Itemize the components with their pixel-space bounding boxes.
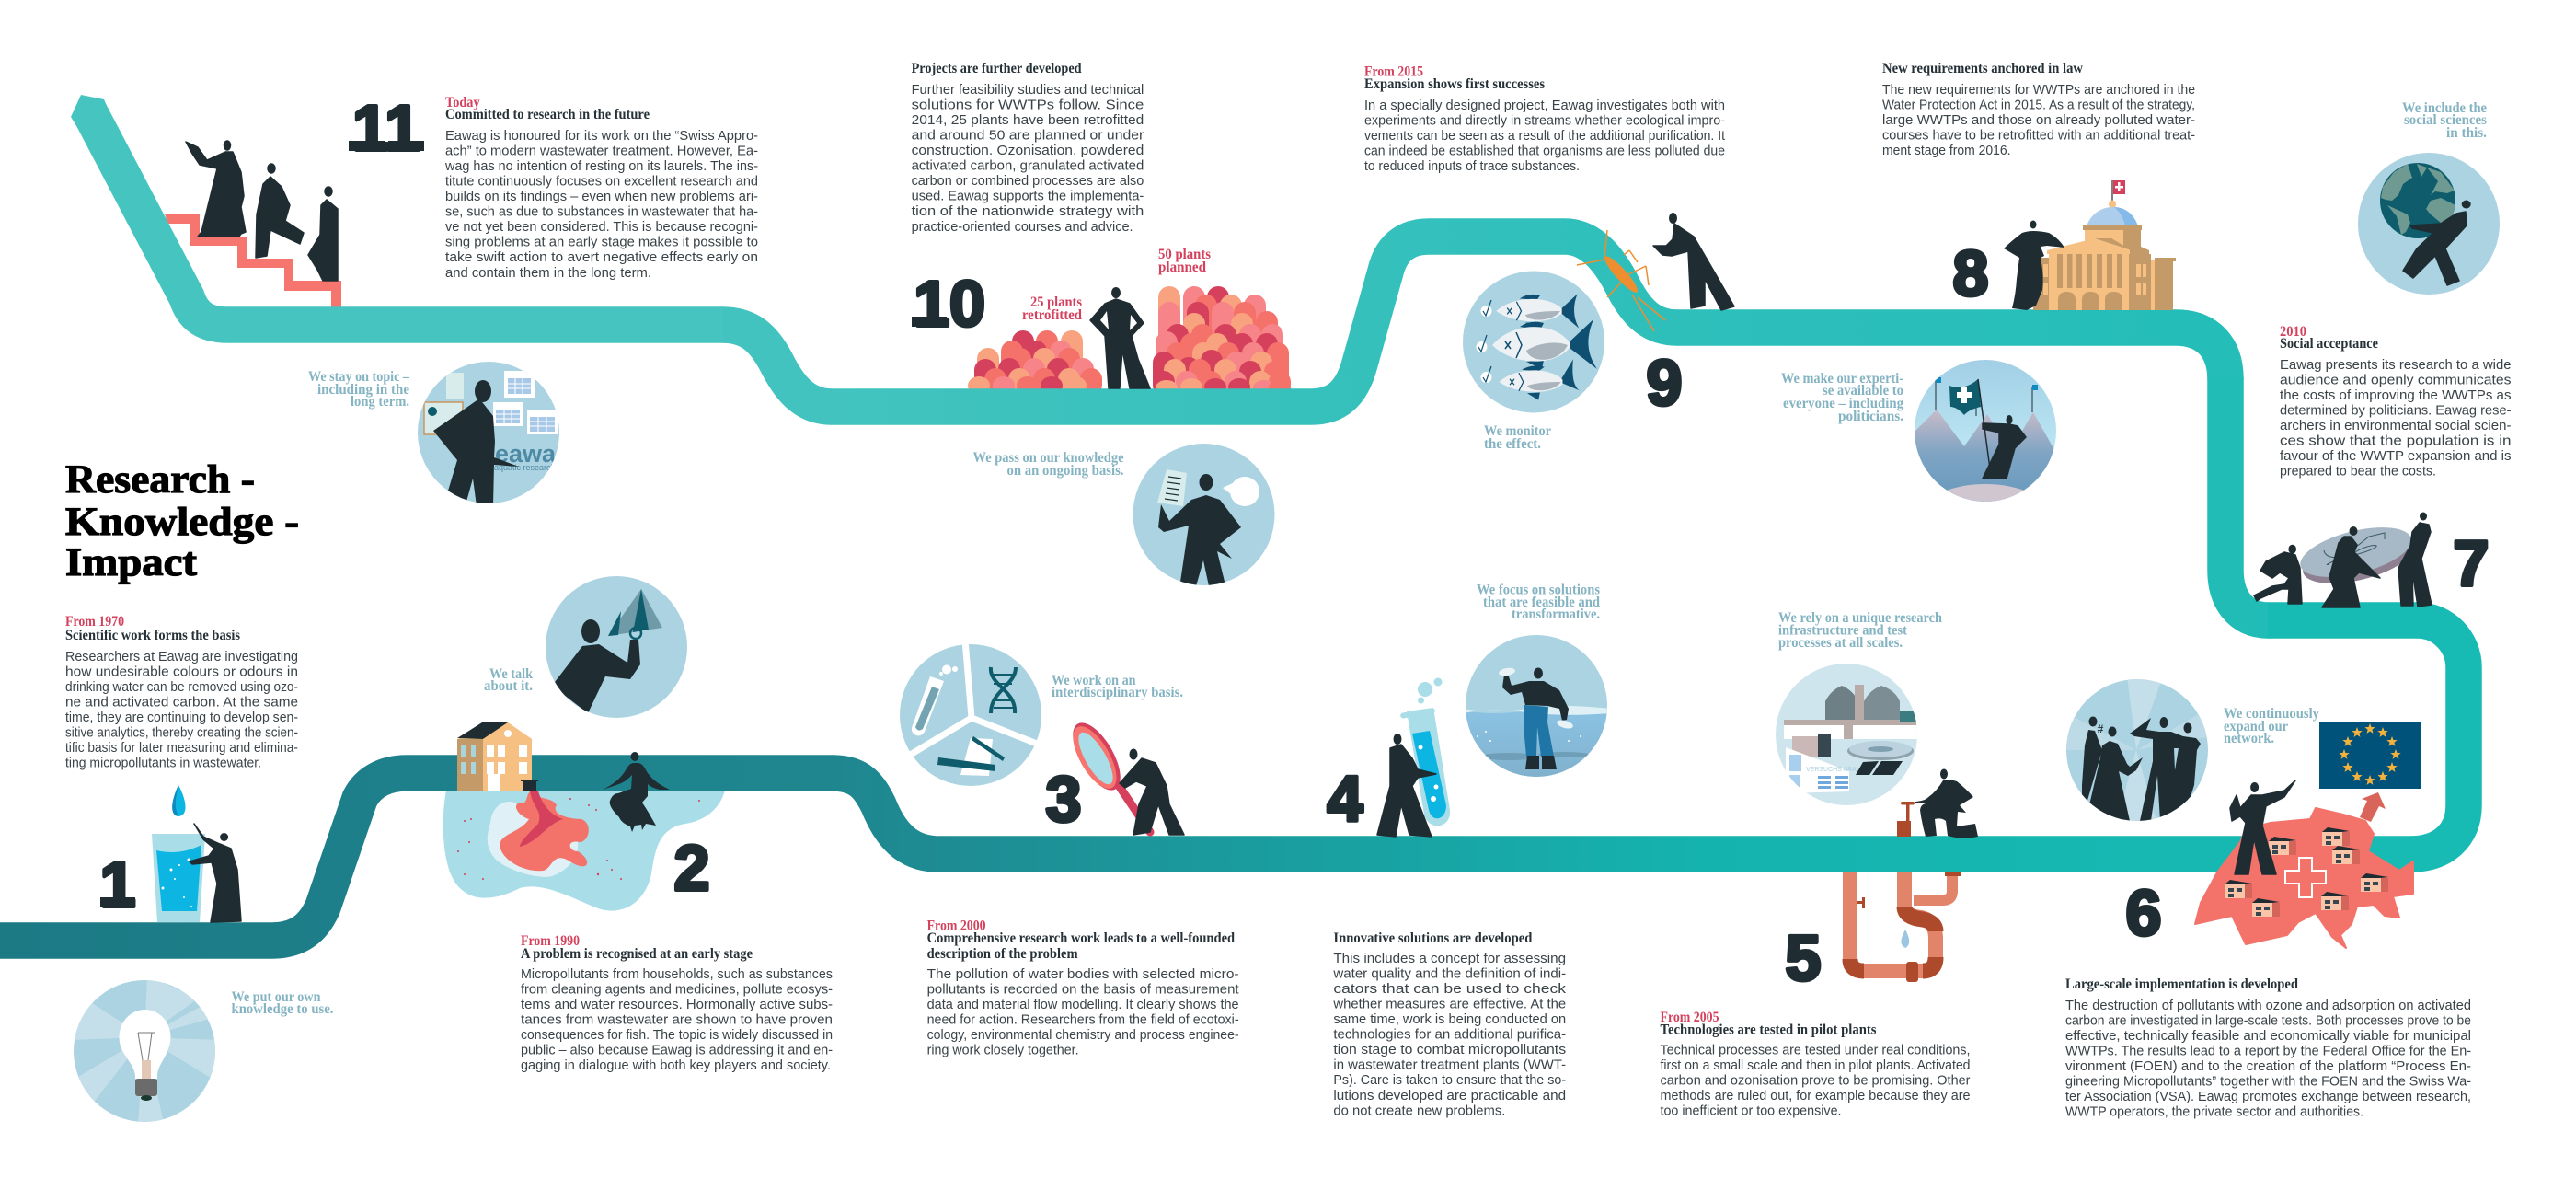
label: we stay on topic <box>308 369 409 410</box>
pile of 50 planned plants <box>1153 286 1291 396</box>
label: 25 plants retrofitted: 25 plants <box>1030 295 1082 310</box>
text block: step 6: WWTP operators, the private sector and authorities. <box>2065 1105 2363 1120</box>
circle icon: long-term topic <box>418 362 559 503</box>
text block: step 2 <box>521 933 833 1073</box>
text block: step 1 <box>65 614 298 771</box>
label: we monitor the effect: the effect. <box>1484 436 1541 452</box>
text block: step 7 <box>2280 324 2512 479</box>
label: 50 plants planned: 50 plants <box>1158 247 1211 262</box>
text block: step 9: In a specially designed project, Eawag investigates both with <box>1364 98 1725 113</box>
label: we rely on a unique research infrastructure: infrastructure and test <box>1778 622 1908 639</box>
text block: step 11: builds on its findings – even when new problems ari- <box>445 190 758 204</box>
text block: step 1: how undesirable colours or odours in <box>65 664 298 679</box>
step 1: glass, drop and figure <box>152 785 241 922</box>
text block: step 11: Today <box>445 95 480 110</box>
label: we pass on our knowledge: We pass on our knowledge <box>973 450 1124 466</box>
text block: step 4: do not create new problems. <box>1333 1103 1505 1118</box>
label: we put our own knowledge to use <box>232 989 334 1017</box>
text block: step 2: tems and water resources. Hormonally active subs- <box>521 998 833 1012</box>
label: 50 plants planned: planned <box>1158 260 1206 275</box>
text block: step 7: Eawag presents its research to a wide <box>2280 358 2512 373</box>
step 7: coin and three figures <box>2254 512 2432 607</box>
step 10: figure between piles <box>1090 287 1150 388</box>
text block: step 8: Water Protection Act in 2015. As a result of the strategy, <box>1882 98 2195 112</box>
text block: step 5: Technologies are tested in pilot plants <box>1660 1022 1877 1037</box>
text block: step 3: description of the problem <box>927 946 1078 962</box>
number 8: 8 <box>1953 237 1988 309</box>
label: we include the social sciences <box>2402 100 2487 141</box>
text block: step 10: carbon or combined processes are also <box>912 174 1144 189</box>
text block: step 10: Further feasibility studies and technical <box>912 83 1144 98</box>
text block: step 6: ter Association (VSA). Eawag promotes exchange between research, <box>2065 1090 2471 1104</box>
circle icon: mountain flag <box>1915 360 2056 502</box>
text block: step 11: titute continuously focuses on excellent research and <box>445 175 758 190</box>
circle icon: research infrastructure <box>1776 664 1918 805</box>
text block: step 4: in wastewater treatment plants (WWT- <box>1333 1058 1566 1073</box>
text block: step 3: ring work closely together. <box>927 1044 1079 1058</box>
label: we work on an interdisciplinary basis: We work on an <box>1052 673 1136 688</box>
text block: step 9: experiments and directly in streams whether ecological impro- <box>1364 114 1725 129</box>
label: we put our own knowledge to use: We put our own <box>232 989 321 1005</box>
dna helix <box>991 667 1016 713</box>
text block: step 1: tific basis for later measuring and elimina- <box>65 741 298 756</box>
label: 50 plants planned <box>1158 247 1211 275</box>
label: we include the social sciences: in this. <box>2446 125 2487 141</box>
text block: step 11: ach” to modern wastewater treatment. However, Ea- <box>445 144 758 158</box>
text block: step 4: tion stage to combat micropollutants <box>1333 1043 1566 1057</box>
text block: step 4: water quality and the definition of indi- <box>1332 966 1566 981</box>
text block: step 3: need for action. Researchers from the field of ecotoxi- <box>927 1013 1239 1028</box>
text block: step 11: se, such as due to substances in wastewater that ha- <box>445 205 758 220</box>
label: we focus on solutions: We focus on solutions <box>1477 583 1600 598</box>
text block: step 8: courses have to be retrofitted with an additional treat- <box>1882 129 2195 144</box>
text block: step 2: From 1990 <box>521 933 580 949</box>
number 11: 11 <box>352 92 420 164</box>
text block: step 7: determined by politicians. Eawag rese- <box>2280 404 2512 419</box>
text block: step 7: Social acceptance <box>2280 336 2378 352</box>
text block: step 4: same time, work is being conducted on <box>1333 1012 1566 1027</box>
label: 25 plants retrofitted: retrofitted <box>1022 307 1082 323</box>
text block: step 11: Eawag is honoured for its work on the “Swiss Appro- <box>445 129 758 144</box>
text block: step 10: Projects are further developed <box>912 61 1082 76</box>
label: we continuously expand our network <box>2224 706 2319 746</box>
text block: step 7: prepared to bear the costs. <box>2280 465 2436 479</box>
label: we talk about it: We talk <box>489 666 533 682</box>
label: we monitor the effect: We monitor <box>1484 423 1551 439</box>
text block: step 8: large WWTPs and those on already polluted water- <box>1882 113 2195 128</box>
label: we pass on our knowledge: on an ongoing basis. <box>1006 463 1124 479</box>
text block: step 6: carbon are investigated in large-scale tests. Both processes prove to be <box>2065 1014 2471 1029</box>
circle icon: megaphone <box>546 576 687 718</box>
circle icon: long-term topic: aquatic research <box>494 463 556 472</box>
pile of 25 retrofitted plants <box>968 330 1102 396</box>
text block: step 3: data and material flow modelling. It clearly shows the <box>927 998 1239 1012</box>
icon: pipes under the path <box>1850 865 1961 982</box>
label: we continuously expand our network: We continuously <box>2224 706 2319 722</box>
text block: step 5: first on a small scale and then in pilot plants. Activated <box>1660 1058 1971 1073</box>
circle icon: research infrastructure: VERSUCHS ARA <box>1806 767 1857 773</box>
text block: step 7: the costs of improving the WWTPs as <box>2280 388 2512 403</box>
text block: step 3: cology, environmental chemistry and process enginee- <box>927 1028 1239 1043</box>
text block: step 4: whether measures are effective. At the <box>1332 998 1566 1012</box>
label: we rely on a unique research infrastructure <box>1778 610 1942 651</box>
label: we stay on topic: including in the <box>317 382 409 398</box>
number 3: 3 <box>1046 763 1081 835</box>
number 4: 4 <box>1328 763 1363 835</box>
text block: step 7: audience and openly communicates <box>2280 374 2512 388</box>
text block: step 3: From 2000 <box>927 918 986 934</box>
label: we talk about it <box>484 666 533 694</box>
text block: step 5: too inefficient or too expensive. <box>1660 1104 1842 1119</box>
arrow tip of the path <box>71 95 110 129</box>
text block: step 6 <box>2065 976 2471 1120</box>
number 2: 2 <box>674 832 709 904</box>
icon: stairs behind path <box>165 214 341 313</box>
text block: step 1: ne and activated carbon. At the same <box>65 696 298 711</box>
number 10: 10 <box>914 268 985 340</box>
text block: step 10: construction. Ozonisation, powdered <box>912 144 1144 158</box>
title: Impact <box>65 541 198 584</box>
text block: step 10: 2014, 25 plants have been retrofitted <box>912 113 1144 128</box>
text block: step 2: Micropollutants from households, such as substances <box>521 967 833 982</box>
text block: step 4: cators that can be used to check <box>1333 982 1567 997</box>
text block: step 11: wag has no intention of resting on its laurels. The ins- <box>444 159 758 174</box>
text block: step 5: From 2005 <box>1660 1010 1719 1025</box>
fish 2 <box>1492 319 1597 369</box>
small houses <box>2225 827 2388 917</box>
text block: step 4: Innovative solutions are developed <box>1333 930 1533 946</box>
text block: step 7: favour of the WWTP expansion and is <box>2280 449 2512 464</box>
label: we include the social sciences: social sciences <box>2404 112 2487 128</box>
text block: step 6: vironment (FOEN) and to the creation of the platform “Process En- <box>2065 1059 2471 1074</box>
text block: step 11: sing problems at an early stage makes it possible to <box>445 236 758 250</box>
text block: step 8: The new requirements for WWTPs are anchored in the <box>1882 83 2195 98</box>
text block: step 2: tances from wastewater are shown to have proven <box>521 1013 833 1028</box>
text block: step 3: The pollution of water bodies with selected micro- <box>927 967 1239 982</box>
text block: step 11: take swift action to avert negative effects early on <box>445 250 758 265</box>
text block: step 9: can indeed be established that organisms are less polluted due <box>1364 144 1725 159</box>
text block: step 4: technologies for an additional purifica- <box>1333 1028 1566 1043</box>
text block: step 1: ting micropollutants in wastewater. <box>65 757 261 771</box>
label: we stay on topic: We stay on topic – <box>308 369 409 385</box>
label: we rely on a unique research infrastructure: processes at all scales. <box>1778 635 1903 651</box>
text block: step 6: The destruction of pollutants with ozone and adsorption on activated <box>2065 999 2471 1013</box>
text block: step 7: ces show that the population is in <box>2280 434 2512 449</box>
text block: step 4 <box>1332 930 1567 1118</box>
number 9: 9 <box>1647 347 1682 419</box>
text block: step 1: Scientific work forms the basis <box>65 628 240 643</box>
circle icon: light bulb <box>72 976 221 1123</box>
text block: step 11 <box>444 95 758 281</box>
EU flag <box>2319 722 2421 789</box>
text block: step 1: time, they are continuing to develop sen- <box>65 711 298 725</box>
title: Knowledge - <box>65 501 299 544</box>
label: 25 plants retrofitted <box>1022 295 1082 323</box>
check marks <box>1476 300 1492 383</box>
text block: step 6: effective, technically feasible and economically viable for municipal <box>2065 1029 2471 1044</box>
text block: step 4: lutions developed are practicable and <box>1333 1089 1566 1103</box>
label: we focus on solutions <box>1477 583 1600 622</box>
step 3: magnifier and figure <box>1064 715 1184 835</box>
text block: step 10: tion of the nationwide strategy with <box>912 204 1144 219</box>
number 7: 7 <box>2454 527 2489 599</box>
label: we rely on a unique research infrastructure: We rely on a unique research <box>1778 610 1942 626</box>
step 8: parliament building and figure <box>2004 180 2176 310</box>
label: we make our expertise available: We make our experti- <box>1781 371 1903 387</box>
text block: step 2: consequences for fish. The topic is widely discussed in <box>521 1028 833 1043</box>
label: we work on an interdisciplinary basis: interdisciplinary basis. <box>1052 685 1183 700</box>
text block: step 10: used. Eawag supports the implementa- <box>912 190 1144 204</box>
icon: plant piles <box>968 286 1291 396</box>
text block: step 3 <box>927 918 1239 1058</box>
label: we talk about it: about it. <box>484 678 533 694</box>
circle icon: network: # <box>2098 722 2104 735</box>
text block: step 4: This includes a concept for assessing <box>1333 952 1566 966</box>
text block: step 1: From 1970 <box>65 614 124 630</box>
circle icon: monitoring fish <box>1463 271 1604 412</box>
label: we focus on solutions: transformative. <box>1512 607 1600 622</box>
text block: step 9: Expansion shows first successes <box>1364 76 1545 92</box>
figures on the stairs, step 11 <box>186 141 338 281</box>
text block: step 7: archers in environmental social scien- <box>2280 419 2512 433</box>
circle icon: network <box>2065 676 2213 824</box>
circle icon: passing on knowledge <box>1133 444 1275 586</box>
text block: step 7: 2010 <box>2280 324 2306 340</box>
test tube <box>912 664 958 735</box>
label: we stay on topic: long term. <box>351 394 409 410</box>
text block: step 3: Comprehensive research work leads to a well-founded <box>927 930 1235 946</box>
text block: step 2: from cleaning agents and medicines, pollute ecosys- <box>521 983 833 998</box>
text block: step 2: gaging in dialogue with both key players and society. <box>521 1058 831 1073</box>
text block: step 11: and contain them in the long term. <box>445 266 651 281</box>
step 6: Switzerland map, houses, EU flag and figure <box>2195 722 2421 948</box>
label: we include the social sciences: We include the <box>2402 100 2487 116</box>
label: we make our expertise available: everyone – including <box>1783 396 1903 411</box>
text block: step 8: ment stage from 2016. <box>1882 144 2011 158</box>
text block: step 2: A problem is recognised at an early stage <box>521 946 753 962</box>
number 1: 1 <box>100 849 135 920</box>
circle icon: person carrying the globe <box>2358 153 2500 295</box>
text block: step 10: solutions for WWTPs follow. Since <box>912 98 1144 112</box>
label: we make our expertise available <box>1781 371 1903 424</box>
text block: step 10: activated carbon, granulated activated <box>912 159 1144 174</box>
label: we pass on our knowledge <box>973 450 1124 479</box>
text block: step 5: methods are ruled out, for example because they are <box>1660 1089 1971 1103</box>
text block: step 5: carbon and ozonisation prove to be promising. Other <box>1660 1074 1971 1089</box>
text block: step 5: Technical processes are tested under real conditions, <box>1660 1044 1971 1058</box>
fish 1 <box>1496 294 1579 329</box>
label: we continuously expand our network: expand our <box>2224 719 2288 734</box>
title <box>65 458 299 584</box>
text block: step 8: New requirements anchored in law <box>1882 61 2084 76</box>
sitting figure <box>603 752 670 832</box>
pointing figure <box>2230 780 2295 874</box>
label: we focus on solutions: that are feasible and <box>1483 595 1600 610</box>
label: we monitor the effect <box>1484 423 1551 452</box>
circle icon: long-term topic: eawag <box>495 440 571 468</box>
arrow toward the flag <box>2360 792 2386 822</box>
text block: step 9 <box>1364 64 1725 174</box>
label: we work on an interdisciplinary basis <box>1052 673 1183 700</box>
label: we continuously expand our network: network. <box>2224 731 2274 746</box>
step 5: valve and kneeling figure <box>1897 769 1978 838</box>
circle icon: focus on solutions <box>1463 635 1610 782</box>
text block: step 11: Committed to research in the future <box>445 107 650 122</box>
text block: step 4: Ps). Care is taken to ensure that the so- <box>1333 1073 1566 1088</box>
text block: step 1: sitive analytics, thereby creating the scien- <box>65 726 298 741</box>
text block: step 1: Researchers at Eawag are investigating <box>65 650 298 664</box>
text block: step 9: to reduced inputs of trace substances. <box>1364 159 1580 174</box>
ruler and pencil <box>937 736 1005 776</box>
text block: step 11: ve not yet been considered. This is because recogni- <box>445 220 758 235</box>
label: we put our own knowledge to use: knowledge to use. <box>232 1001 334 1017</box>
text block: step 2: public – also because Eawag is addressing it and en- <box>521 1044 833 1058</box>
text block: step 6: gineering Micropollutants” together with the FOEN and the Swiss Wa- <box>2065 1075 2471 1090</box>
winding path band <box>0 108 2464 941</box>
text block: step 6: Large-scale implementation is developed <box>2065 976 2298 992</box>
text block: step 9: From 2015 <box>1364 64 1423 80</box>
label: we make our expertise available: se available to <box>1823 383 1903 399</box>
text block: step 5 <box>1660 1010 1971 1119</box>
circle icon: interdisciplinary pie <box>900 640 1041 786</box>
text block: step 10: practice-oriented courses and advice. <box>912 220 1133 235</box>
label: we make our expertise available: politicians. <box>1838 409 1903 424</box>
fish 3 <box>1500 359 1581 400</box>
text block: step 3: pollutants is recorded on the basis of measurement <box>927 983 1239 998</box>
text block: step 10: and around 50 are planned or under <box>912 129 1144 144</box>
text block: step 6: WWTPs. The results lead to a report by the Federal Office for the En- <box>2065 1045 2471 1059</box>
title: Research - <box>65 458 255 502</box>
text block: step 10 <box>912 61 1144 235</box>
text block: step 9: vements can be seen as a result of the additional purification. It <box>1364 129 1725 144</box>
text block: step 8 <box>1882 61 2195 158</box>
number 6: 6 <box>2126 877 2161 949</box>
house <box>457 722 538 791</box>
number 5: 5 <box>1786 922 1821 994</box>
step 4: test tube and figure <box>1377 677 1450 837</box>
step 9: stonefly and observer <box>1577 213 1734 331</box>
step 2: lake with pollution, house and figure <box>443 722 725 911</box>
text block: step 1: drinking water can be removed using ozo- <box>65 680 298 695</box>
